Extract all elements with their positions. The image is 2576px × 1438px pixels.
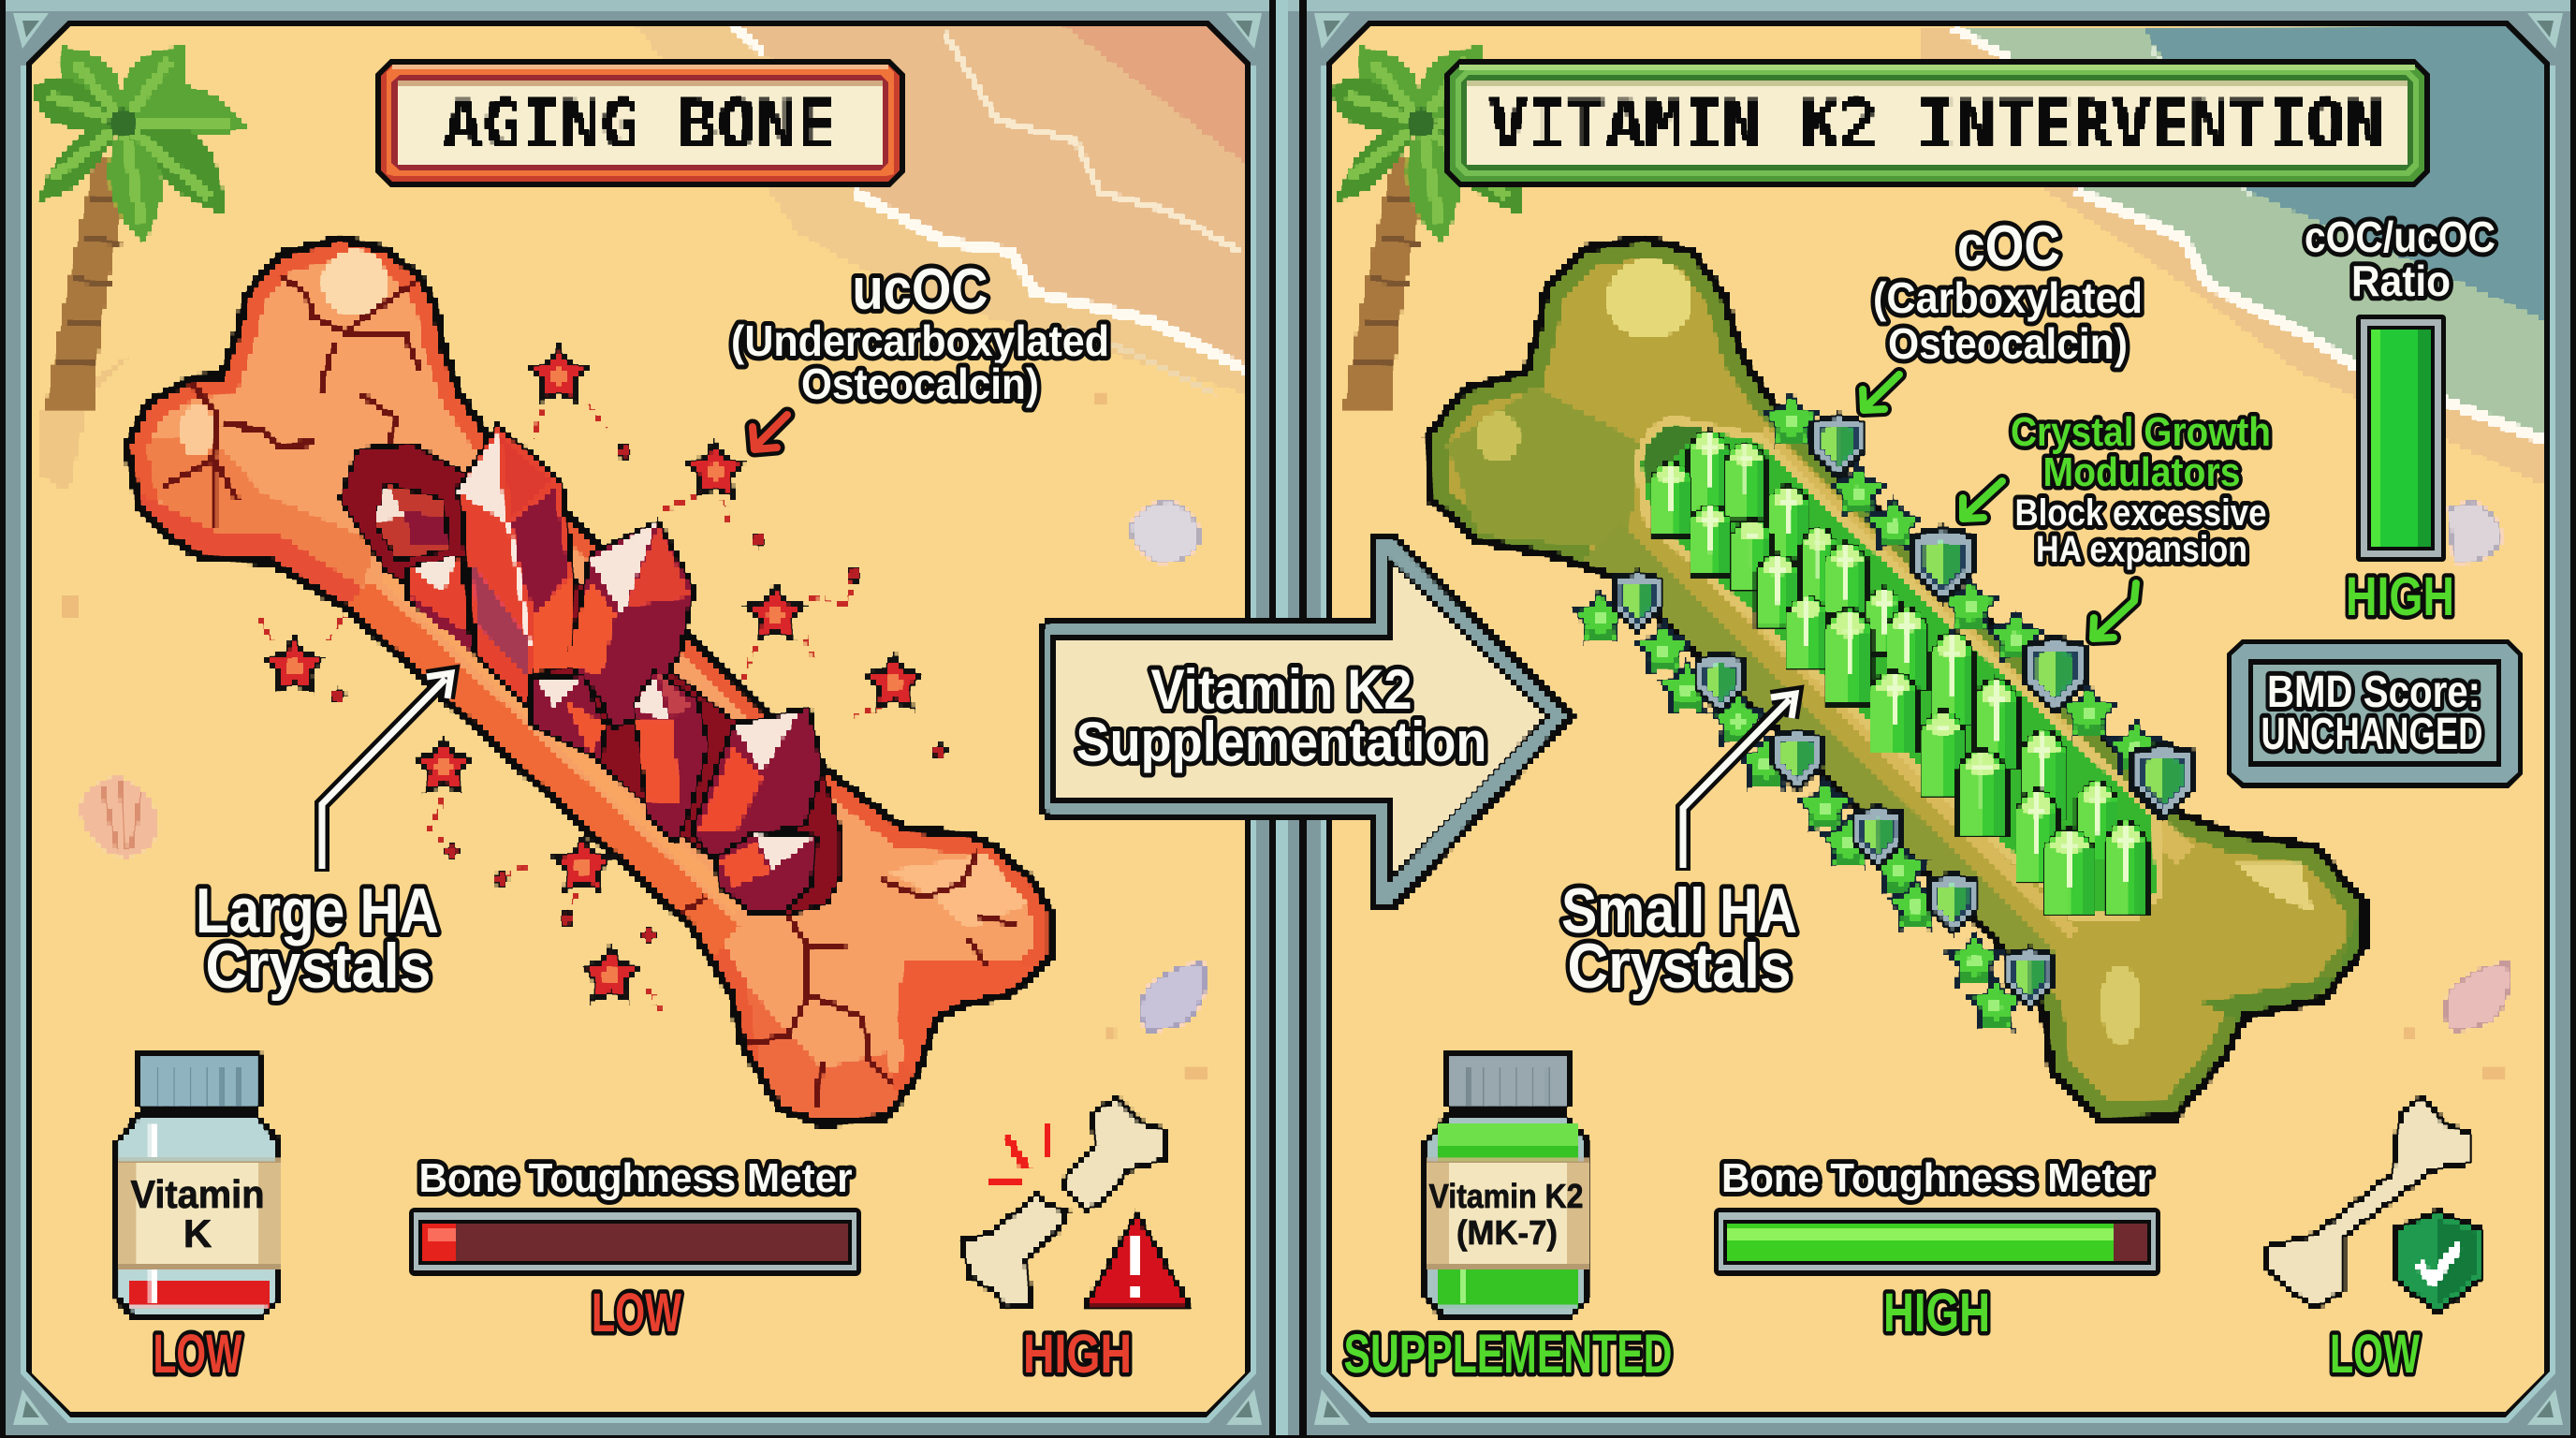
crystal: inner small	[375, 483, 449, 560]
meter label left: Bone Toughness Meter	[419, 1155, 852, 1201]
shell: pink right	[2445, 963, 2510, 1032]
arrow: to large crystals	[322, 673, 451, 872]
status: high fracture risk: HIGH	[1023, 1324, 1132, 1385]
arrow label: Supplementation	[1076, 711, 1486, 773]
bone outline	[1427, 239, 2364, 1121]
callout: cOC label: Osteocalcin)	[1888, 319, 2128, 368]
icon: strong bone	[2265, 1098, 2471, 1308]
cracks	[165, 274, 1018, 1109]
left palm shadow	[41, 353, 131, 493]
crystal: tall	[458, 424, 575, 707]
BMD text	[2261, 668, 2482, 759]
red ucOC molecules with dotted trails	[258, 346, 946, 1012]
icon: check shield	[2393, 1211, 2482, 1313]
trench	[1638, 419, 2159, 917]
label: large HA crystals: Crystals	[206, 931, 431, 1002]
crystal: lower left	[408, 557, 472, 650]
callout: ucOC label: Osteocalcin)	[801, 360, 1039, 408]
label: large HA crystals: Large HA	[196, 875, 439, 946]
shell: white left	[1131, 501, 1199, 563]
title banner: aging bone	[375, 59, 905, 187]
sand specks	[63, 391, 2507, 1081]
callout: ucOC label	[731, 257, 1109, 408]
green crystal cluster	[1650, 430, 2147, 915]
left palm tree	[33, 46, 250, 413]
arrow: to expansion block	[2093, 583, 2136, 638]
callout: ucOC label: ucOC	[852, 257, 988, 322]
label: vitamin k2 bottle: Vitamin K2	[1428, 1177, 1584, 1215]
arrow: vitamin k2 supplementation	[1037, 532, 1575, 911]
icon: broken bone	[961, 1098, 1166, 1308]
callout: crystal growth modulators: Crystal Growth	[2011, 409, 2271, 455]
shell: pink left	[79, 776, 159, 858]
label: small HA crystals: Small HA	[1561, 875, 1797, 946]
label: vitamin k2 bottle	[1428, 1177, 1584, 1252]
label: vitamin k2 bottle: (MK-7)	[1456, 1213, 1558, 1252]
crystal: bottom	[716, 832, 816, 911]
status: high ratio: HIGH	[2346, 566, 2454, 627]
arrow: to ucOC	[753, 415, 787, 449]
status: high toughness: HIGH	[1883, 1283, 1990, 1343]
BMD text: UNCHANGED	[2261, 710, 2482, 759]
status: supplemented: SUPPLEMENTED	[1344, 1324, 1672, 1385]
label: small HA crystals: Crystals	[1567, 931, 1792, 1002]
label: vitamin k bottle: K	[183, 1211, 212, 1255]
callout: ucOC label: (Undercarboxylated	[731, 316, 1109, 365]
crystal: right	[691, 707, 823, 861]
label: vitamin k bottle	[131, 1172, 264, 1255]
status: low fracture risk: LOW	[2330, 1324, 2420, 1385]
green cOC stars	[1573, 393, 2163, 1029]
left beach shoreline	[633, 23, 1245, 394]
status: low vitamin k: LOW	[154, 1324, 242, 1385]
shell: lilac left	[1141, 963, 1206, 1032]
callout: crystal growth modulators: Block excessive	[2014, 492, 2267, 534]
shields	[1614, 415, 2194, 1008]
crystal: centre small	[530, 675, 605, 761]
dark end of trench	[1642, 424, 1703, 485]
callout: crystal growth modulators: Modulators	[2042, 449, 2241, 495]
title text: VITAMIN K2 INTERVENTION	[1488, 86, 2385, 163]
gauge: cOC/ucOC ratio bar	[2356, 315, 2446, 562]
callout: crystal growth modulators	[2011, 409, 2271, 570]
label: vitamin k bottle: Vitamin	[131, 1172, 264, 1216]
status: low toughness: LOW	[592, 1283, 681, 1343]
shell: white right	[2448, 501, 2501, 563]
toughness meter: high	[1714, 1208, 2160, 1276]
meter label right: Bone Toughness Meter	[1721, 1155, 2152, 1201]
vitamin K bottle	[117, 1051, 279, 1318]
arrow: to small crystals	[1683, 694, 1795, 871]
icon: fracture sparks	[989, 1123, 1051, 1186]
callout: cOC label: cOC	[1957, 214, 2060, 279]
toughness meter: low	[409, 1208, 861, 1276]
callout: crystal growth modulators: HA expansion	[2036, 529, 2247, 570]
title banner: vitamin k2 intervention	[1444, 59, 2430, 187]
title text: AGING BONE	[444, 86, 835, 163]
label: small HA crystals	[1561, 875, 1797, 1002]
right palm tree	[1331, 46, 1547, 413]
icon: warning triangle	[1084, 1212, 1191, 1308]
cavity	[340, 444, 842, 915]
arrow: to modulators	[1963, 481, 2002, 519]
vitamin K2 bottle	[1426, 1051, 1588, 1318]
right beach shoreline	[1921, 23, 2545, 487]
panel: BMD score	[2227, 639, 2523, 788]
callout: cOC label: (Carboxylated	[1873, 273, 2143, 322]
label: ratio: Ratio	[2351, 257, 2451, 305]
BMD text: BMD Score:	[2267, 668, 2481, 717]
aging bone	[115, 230, 1068, 1134]
arrow: to cOC	[1863, 374, 1899, 410]
label: ratio: cOC/ucOC	[2305, 213, 2496, 261]
large red HA crystals	[340, 424, 842, 915]
arrow label	[1076, 658, 1486, 773]
label: ratio	[2305, 213, 2496, 305]
arrow label: Vitamin K2	[1151, 658, 1412, 721]
bone outline	[126, 239, 1051, 1124]
small green HA crystals with modulators	[1573, 393, 2194, 1029]
callout: cOC label	[1873, 214, 2143, 368]
label: large HA crystals	[196, 875, 439, 1002]
crystal: mid	[565, 521, 695, 728]
crystal: lower mid	[634, 671, 709, 844]
healthy green bone	[1412, 230, 2382, 1134]
